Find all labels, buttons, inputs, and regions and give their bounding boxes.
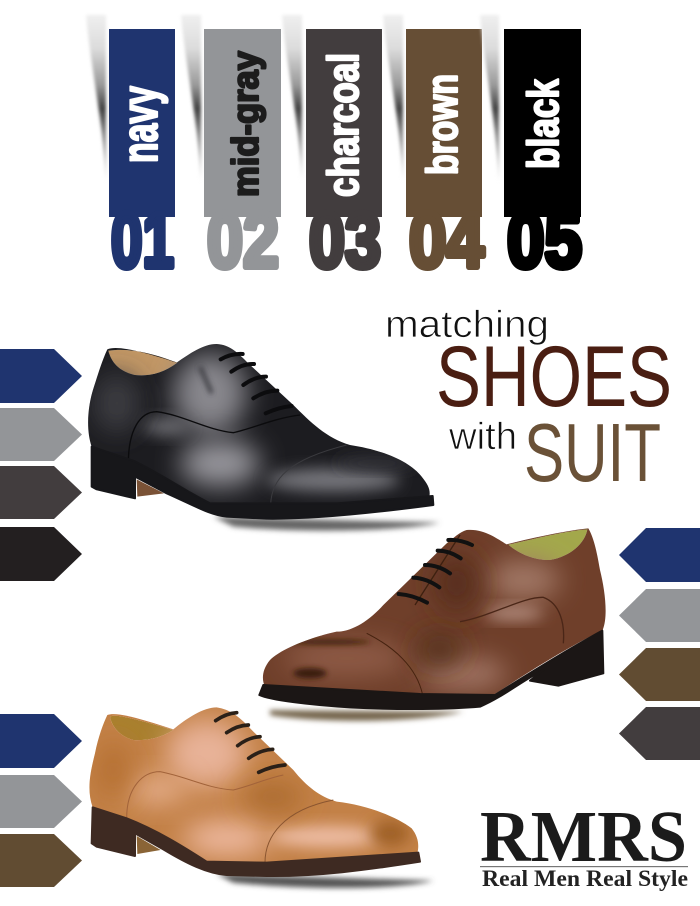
- tab 03 charcoal: charcoal: [319, 53, 368, 197]
- tab 04 brown: [383, 15, 484, 284]
- tab 01 navy: [86, 15, 175, 284]
- title: [385, 304, 672, 499]
- tab 05 black: [480, 15, 582, 284]
- title: with: [448, 416, 517, 458]
- logo: RMRS: Real Men Real Style: [482, 866, 688, 891]
- shoe: tan oxford: [89, 707, 433, 888]
- arrows: suits for black shoes: [0, 349, 82, 581]
- tab 01 navy: 01: [111, 196, 174, 284]
- logo: RMRS: RMRS: [480, 796, 687, 877]
- tab 04 brown: 04: [409, 196, 484, 284]
- tab 01 navy: navy: [112, 86, 168, 163]
- arrows: suits for brown shoes: [619, 528, 700, 760]
- tab 02 mid-gray: [181, 15, 281, 284]
- shoe: dark brown oxford: [259, 528, 606, 721]
- tab 05 black: 05: [507, 196, 582, 284]
- title: matching: [385, 304, 549, 346]
- tab 03 charcoal: 03: [309, 196, 381, 284]
- tab 05 black: black: [519, 79, 568, 169]
- tab 02 mid-gray: mid-gray: [225, 51, 266, 197]
- panel: suit colour tabs: [86, 15, 582, 284]
- tab 04 brown: brown: [418, 74, 467, 175]
- arrows: suits for tan shoes: [0, 714, 82, 887]
- tab 03 charcoal: [282, 15, 382, 284]
- tab 02 mid-gray: 02: [207, 196, 279, 284]
- shoe: black oxford: [88, 344, 440, 531]
